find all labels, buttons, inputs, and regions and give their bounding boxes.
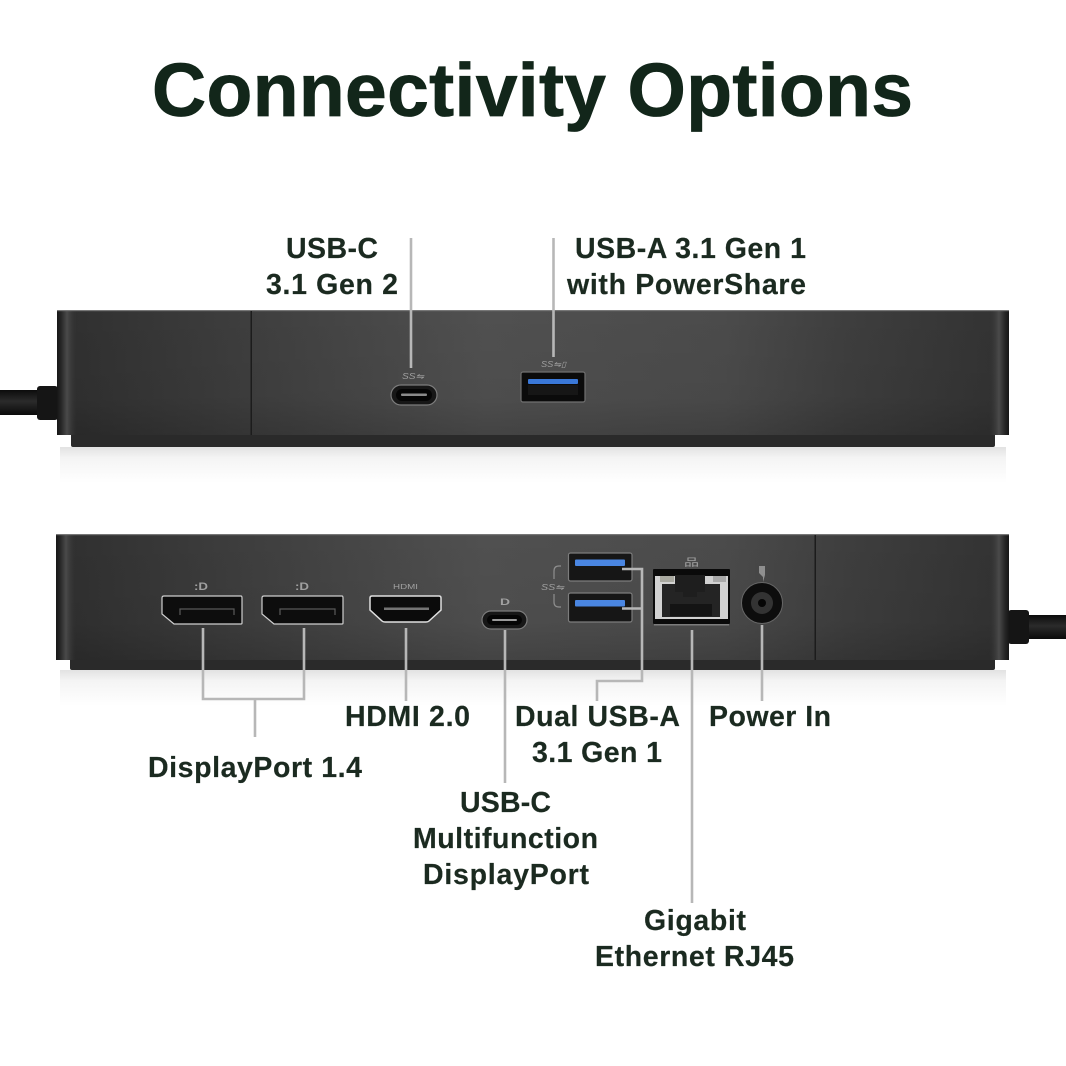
dock body [57, 310, 1009, 435]
port: DisplayPort 1: :D [194, 581, 208, 593]
label: USB-A 3.1 Gen 1 with PowerShare: with PowerShare [566, 269, 806, 301]
port: DisplayPort 2: :D [295, 581, 309, 593]
port: USB-C 3.1 Gen 2: SS⇋ [402, 372, 426, 381]
panel: front view of dock [0, 238, 1009, 483]
label: USB-A 3.1 Gen 1 with PowerShare [566, 233, 806, 301]
label: USB-A 3.1 Gen 1 with PowerShare: USB-A 3.1 Gen 1 [575, 233, 806, 265]
label: Power In: Power In [709, 701, 831, 733]
leader line: USB-C multifunction [504, 630, 506, 783]
port: HDMI: HDMI [393, 584, 418, 591]
port: Ethernet RJ45: 品 [684, 557, 699, 569]
port: USB-A with PowerShare: SS⇋▯ [541, 360, 567, 369]
leader line: power [761, 625, 763, 701]
label: Gigabit Ethernet RJ45: Gigabit [644, 905, 746, 937]
port: Ethernet RJ45 [653, 557, 730, 626]
dock body [56, 534, 1009, 660]
label: Gigabit Ethernet RJ45 [595, 905, 794, 973]
port: dual USB-A: SS⇋ [541, 583, 566, 592]
port: USB-A with PowerShare [521, 360, 585, 402]
leader line: Ethernet [691, 630, 693, 903]
title: Connectivity Options [152, 48, 913, 132]
label: USB-C Multifunction DisplayPort [413, 787, 598, 891]
reflection under front dock [60, 447, 1006, 483]
leader line: USB-C [410, 238, 412, 368]
leader lines: DisplayPort [203, 628, 304, 737]
port: USB-C multifunction: D [500, 597, 511, 607]
port: HDMI [370, 584, 441, 622]
power cable, left [0, 386, 58, 420]
label: USB-C 3.1 Gen 2: USB-C [286, 233, 378, 265]
label: USB-C Multifunction DisplayPort: Multifunction [413, 823, 598, 855]
label: USB-C 3.1 Gen 2 [266, 233, 398, 301]
label: DisplayPort 1.4: DisplayPort 1.4 [148, 752, 362, 784]
port: USB-C multifunction [482, 597, 527, 629]
port: DisplayPort 1 [162, 581, 242, 624]
leader lines: dual USB-A [597, 569, 642, 701]
power cable, right [1008, 610, 1066, 644]
port: USB-C 3.1 Gen 2 [391, 372, 437, 405]
label: Dual USB-A 3.1 Gen 1 [515, 701, 680, 769]
label: Dual USB-A 3.1 Gen 1: Dual USB-A [515, 701, 680, 733]
reflection under rear dock [60, 670, 1006, 706]
label: HDMI 2.0: HDMI 2.0 [345, 701, 470, 733]
leader line: USB-A [552, 238, 555, 357]
port: DisplayPort 2 [262, 581, 343, 624]
label: USB-C Multifunction DisplayPort: USB-C [460, 787, 551, 819]
port: power in [742, 566, 782, 624]
label: Dual USB-A 3.1 Gen 1: 3.1 Gen 1 [532, 737, 662, 769]
label: USB-C Multifunction DisplayPort: DisplayPort [423, 859, 590, 891]
leader line: HDMI [405, 628, 407, 701]
dock foot [70, 657, 995, 670]
label: USB-C 3.1 Gen 2: 3.1 Gen 2 [266, 269, 398, 301]
dock foot [71, 433, 995, 447]
port: dual USB-A [541, 553, 632, 622]
panel: rear view of dock [56, 534, 1066, 903]
label: Gigabit Ethernet RJ45: Ethernet RJ45 [595, 941, 794, 973]
